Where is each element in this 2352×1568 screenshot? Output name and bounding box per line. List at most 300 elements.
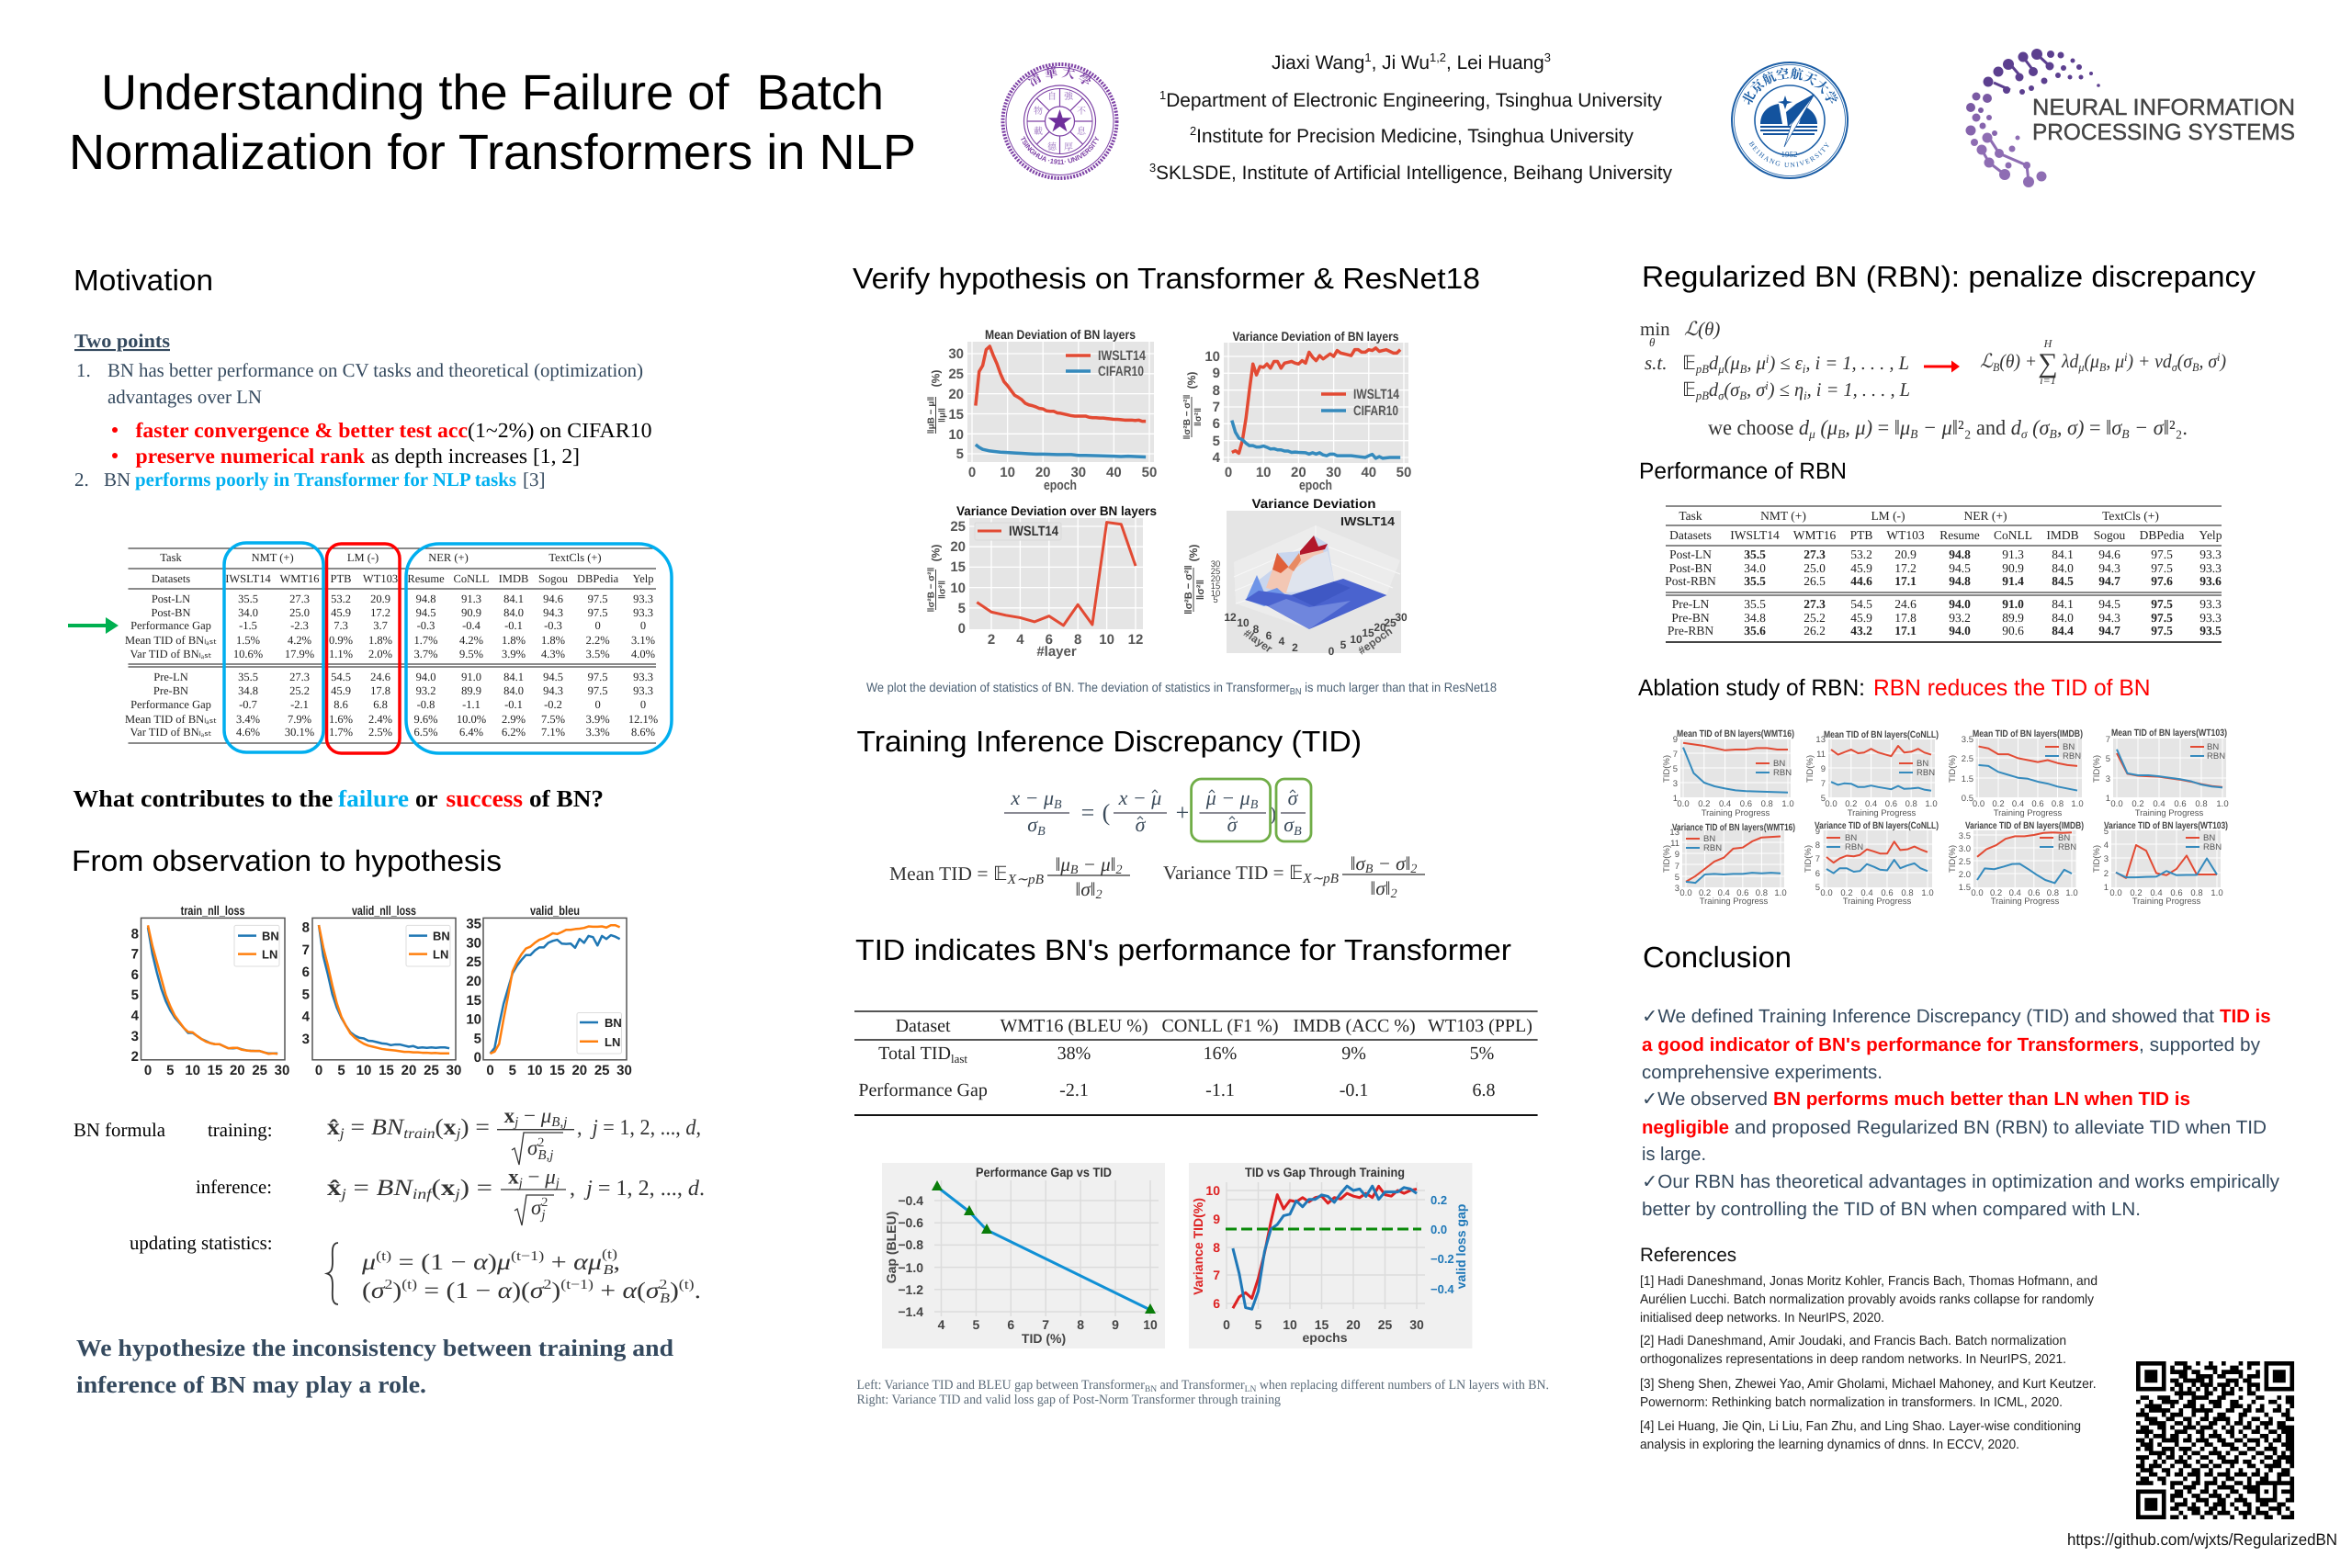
chart: variance TID CoNLL: 0.2 <box>1840 888 1853 898</box>
chart: variance TID WT103: 2 <box>2104 869 2109 879</box>
formula: BN inference: j <box>339 1187 347 1202</box>
heading: performance of RBN: Performance of RBN <box>1639 458 1847 484</box>
formula: updating statistics: (σ <box>362 1279 382 1303</box>
table: BN versus LN across tasks: -1.1 <box>462 698 481 711</box>
chart: variance TID WMT16 <box>1662 822 1795 907</box>
table: performance of RBN: Post-BN <box>1669 561 1713 575</box>
formula: constrained objective: d <box>1709 352 1719 374</box>
text: conclusion bullets: is large. <box>1642 1144 1706 1165</box>
chart: variance TID WT103: 0.4 <box>2150 888 2163 898</box>
chart: valid bleu: 15 <box>549 1063 565 1078</box>
chart: mean TID CoNLL: 1.0 <box>1925 799 1938 809</box>
table: performance of RBN: 17.1 <box>1894 574 1917 588</box>
formula: BN training <box>327 1104 701 1165</box>
formula: variance TID <box>1163 852 1425 901</box>
text: two points: faster convergence & better test acc <box>136 419 468 443</box>
table: performance of RBN: 27.3 <box>1804 597 1826 611</box>
chart: TID vs gap through training: Variance TID(%) <box>1191 1198 1205 1295</box>
formula: BN training: ) = <box>460 1115 490 1140</box>
table: BN versus LN across tasks: Pre-LN <box>153 671 188 683</box>
table: BN versus LN across tasks: DBPedia <box>577 572 619 585</box>
chart: performance gap vs TID: 6 <box>1007 1317 1014 1332</box>
formula: normalization decomposition: σ <box>1227 813 1238 836</box>
panel: ablation study <box>1638 675 2229 907</box>
chart: mean TID CoNLL: 9 <box>1821 764 1826 774</box>
table: performance of RBN: 35.5 <box>1744 597 1766 611</box>
formula: BN inference: x <box>441 1176 456 1201</box>
chart: variance TID CoNLL: Training Progress <box>1843 897 1912 907</box>
text: reference list: orthogonalizes representations in deep random networks. In NeurIPS, 2021. <box>1640 1352 2066 1367</box>
formula: constrained objective: d <box>1709 378 1719 400</box>
chart: 3D variance deviation surface: 10 <box>1237 616 1250 629</box>
chart: variance TID CoNLL: TID(%) <box>1804 845 1814 873</box>
formula: BN inference: ) = <box>460 1176 492 1201</box>
chart: variance deviation over BN layers: 25 <box>950 519 966 535</box>
formula: penalized objective <box>1980 337 2226 387</box>
chart: variance deviation over BN layers: 8 <box>1074 632 1081 648</box>
logo: Tsinghua University: 載 <box>1034 123 1043 137</box>
formula: constrained objective: θ <box>1649 335 1656 349</box>
formula: updating statistics: (t) <box>602 1247 617 1262</box>
text: two points: [3] <box>523 468 546 491</box>
table: performance of RBN: 84.5 <box>2052 574 2074 588</box>
chart: performance gap vs TID: 4 <box>938 1317 945 1332</box>
formula: variance TID: X∼pB <box>1302 872 1339 886</box>
chart: train nll loss: 7 <box>131 947 139 963</box>
formula: BN training: j <box>513 1115 518 1130</box>
chart: performance gap vs TID: −1.2 <box>898 1282 923 1297</box>
table: BN versus LN across tasks: Datasets <box>152 572 190 585</box>
table: performance of RBN: 94.7 <box>2098 574 2120 588</box>
chart: train nll loss: 2 <box>131 1049 139 1065</box>
formula: variance TID: ‖σ‖ <box>1370 877 1397 901</box>
formula: normalization decomposition: σ <box>1027 813 1046 839</box>
formula: penalized objective: , μ <box>2106 350 2124 372</box>
formula: constrained objective <box>1640 318 1910 402</box>
table: BN versus LN across tasks: 3.9% <box>586 713 610 726</box>
chart: mean TID CoNLL: RBN <box>1917 768 1935 778</box>
chart: mean TID WT103: 0.0 <box>2110 799 2123 809</box>
chart: mean TID CoNLL: Training Progress <box>1848 808 1917 818</box>
table: BN versus LN across tasks: 94.8 <box>416 592 435 605</box>
chart: variance TID IMDB: Variance TID of BN layers(IMDB) <box>1965 820 2084 831</box>
authors and affiliations: 2 <box>1190 124 1196 138</box>
table: BN versus LN across tasks: 0.9% <box>329 634 353 647</box>
formula: choice of distance: , σ) <box>2057 416 2084 439</box>
table: BN versus LN across tasks: Performance Gap <box>130 619 211 632</box>
chart: valid bleu: valid_bleu <box>530 903 580 918</box>
table: BN versus LN across tasks: Sogou <box>538 572 569 585</box>
formula: variance TID: Variance TID = 𝔼 <box>1163 862 1302 884</box>
table: performance of RBN: 94.8 <box>1949 547 1971 561</box>
highlight: NER and TextCls columns <box>406 544 672 753</box>
table: performance of RBN: 90.9 <box>2002 561 2024 575</box>
table: performance of RBN: Post-LN <box>1669 547 1712 561</box>
table: TID and performance gap: -0.1 <box>1340 1080 1368 1100</box>
authors and affiliations: , Lei Huang <box>1446 52 1544 73</box>
formula: constrained objective: ) ≤ η <box>1768 378 1804 400</box>
formula: choice of distance: − μ <box>1917 416 1952 439</box>
chart: mean TID WMT16: 0.6 <box>1740 799 1752 809</box>
table: BN versus LN across tasks: 3.5% <box>586 648 610 660</box>
formula: BN training: BN <box>371 1115 405 1140</box>
chart: variance TID WMT16: 5 <box>1675 873 1679 883</box>
formula: constrained objective: , i = 1, . . . , L <box>1805 352 1909 374</box>
chart: variance TID IMDB: 2.5 <box>1959 857 1971 867</box>
table: TID and performance gap: CONLL (F1 %) <box>1161 1016 1279 1036</box>
caption: left and right charts: Left: Variance TID and BLEU gap between Transformer <box>856 1378 1158 1393</box>
chart: variance TID WT103: 1 <box>2104 883 2109 893</box>
formula: BN training: 2 <box>537 1136 544 1150</box>
table: TID and performance gap: Dataset <box>896 1016 951 1036</box>
table: performance of RBN: 25.0 <box>1804 561 1826 575</box>
formula: normalization decomposition: ) <box>1270 802 1276 825</box>
table: performance of RBN: 89.9 <box>2002 611 2024 625</box>
formula: choice of distance: − σ <box>2130 416 2165 439</box>
logo: Tsinghua University: 德 <box>1047 139 1057 152</box>
chart: variance TID CoNLL: RBN <box>1845 842 1863 852</box>
chart: train nll loss: 4 <box>131 1009 140 1024</box>
text: conclusion bullets: a good indicator of BN's performance for Transformers <box>1642 1034 2139 1055</box>
table: BN versus LN across tasks: 97.5 <box>588 684 608 697</box>
chart: variance deviation over BN layers: 20 <box>950 539 966 555</box>
chart: variance deviation over BN layers: 6 <box>1046 632 1053 648</box>
table: TID and performance gap: WT103 (PPL) <box>1428 1016 1532 1036</box>
chart: valid bleu: 5 <box>509 1063 516 1078</box>
chart: mean TID IMDB: TID(%) <box>1948 755 1958 783</box>
table: performance of RBN: 84.4 <box>2052 624 2074 637</box>
chart: valid bleu: 20 <box>571 1063 587 1078</box>
chart: variance TID IMDB: RBN <box>2058 842 2076 852</box>
table: BN versus LN across tasks: -0.1 <box>504 619 523 632</box>
question: what contributes: or <box>415 785 438 812</box>
table: BN versus LN across tasks: 4.2% <box>288 634 311 647</box>
chart: variance deviation of BN layers: 50 <box>1396 465 1411 480</box>
chart: mean deviation of BN layers: Mean Deviation of BN layers <box>985 327 1136 342</box>
table: performance of RBN: 44.6 <box>1850 574 1872 588</box>
chart: mean deviation of BN layers: (%) <box>930 370 943 387</box>
heading: conclusion: Conclusion <box>1643 941 1792 974</box>
chart: train nll loss: LN <box>262 948 277 962</box>
chart: variance TID WT103: 5 <box>2104 827 2109 837</box>
table: BN versus LN across tasks: 1.1% <box>329 648 353 660</box>
formula: BN inference: x <box>508 1165 519 1189</box>
table: BN versus LN across tasks: 94.0 <box>416 671 435 683</box>
table: performance of RBN: 17.1 <box>1894 624 1917 637</box>
table: BN versus LN across tasks: 25.0 <box>289 606 310 619</box>
table: performance of RBN: 27.3 <box>1804 547 1826 561</box>
table: BN versus LN across tasks: -0.1 <box>504 698 523 711</box>
chart: variance TID WMT16: 0.8 <box>1756 888 1768 898</box>
chart: variance TID IMDB: 0.4 <box>2009 888 2021 898</box>
table: TID and performance gap: 16% <box>1204 1043 1237 1064</box>
chart: performance gap vs TID: −1.0 <box>898 1260 923 1275</box>
table: performance of RBN: DBPedia <box>2140 528 2184 542</box>
table: BN versus LN across tasks: 1.7% <box>413 634 438 647</box>
chart: mean TID WMT16: 0.8 <box>1761 799 1773 809</box>
chart: variance TID WT103: TID(%) <box>2092 845 2102 873</box>
chart: TID vs gap through training: 20 <box>1346 1317 1361 1332</box>
chart: variance TID WT103: 0.8 <box>2190 888 2203 898</box>
table: BN versus LN across tasks: 3.4% <box>236 713 260 726</box>
formula: normalization decomposition: σ <box>1136 813 1147 836</box>
chart: 3D variance deviation surface: 20 <box>1374 621 1386 634</box>
chart: variance TID IMDB <box>1948 820 2084 907</box>
text: conclusion bullets: ✓We defined Training Inference Discrepancy (TID) and showed that <box>1642 1006 2214 1027</box>
chart: valid nll loss: 5 <box>337 1063 345 1078</box>
chart: 3D variance deviation surface: Variance Deviation <box>1251 496 1376 511</box>
text: conclusion bullets: better by controlling the TID of BN when compared with LN. <box>1642 1199 2141 1220</box>
chart: TID vs gap through training: −0.2 <box>1430 1252 1454 1266</box>
question: what contributes: failure <box>338 785 409 812</box>
table: BN versus LN across tasks: 6.5% <box>413 726 438 739</box>
formula: penalized objective: (μ <box>2084 350 2099 372</box>
chart: variance TID CoNLL: 5 <box>1815 883 1820 893</box>
formula: constrained objective: , i = 1, . . . , L <box>1807 378 1910 400</box>
table: BN versus LN across tasks: NER (+) <box>428 551 469 564</box>
table: TID and performance gap <box>854 1011 1538 1115</box>
chart: variance TID WT103: 0.0 <box>2109 888 2122 898</box>
chart: variance TID IMDB: BN <box>2058 833 2070 843</box>
text: reference list: analysis in exploring the learning dynamics of dnns. In ECCV, 2020. <box>1640 1438 2019 1452</box>
table: performance of RBN: 94.5 <box>1949 561 1971 575</box>
table: BN versus LN across tasks: 8.6% <box>631 726 655 739</box>
formula: BN inference: 2 <box>541 1196 548 1210</box>
chart: 3D variance deviation surface: (%) <box>1187 545 1200 561</box>
table: BN versus LN across tasks: 94.6 <box>543 592 563 605</box>
chart: 3D variance deviation surface: 2 <box>1292 641 1298 654</box>
formula: constrained objective: μ <box>1717 362 1724 376</box>
chart: variance TID IMDB: Training Progress <box>1991 897 2060 907</box>
chart: valid bleu: 10 <box>466 1012 481 1027</box>
logo: Tsinghua University: 強 <box>1064 88 1074 102</box>
table: BN versus LN across tasks: 34.0 <box>238 606 258 619</box>
table: BN versus LN across tasks: 10.0% <box>457 713 486 726</box>
authors and affiliations <box>1149 51 1672 184</box>
text: two points: as depth increases [1, 2] <box>371 445 580 468</box>
table: performance of RBN: 53.2 <box>1850 547 1872 561</box>
chart: variance deviation of BN layers: CIFAR10 <box>1353 403 1398 419</box>
authors and affiliations: 3 <box>1149 161 1156 175</box>
chart: variance deviation over BN layers: IWSLT14 <box>1009 524 1059 539</box>
table: performance of RBN: 45.9 <box>1850 611 1872 625</box>
formula: penalized objective: i=1 <box>2040 374 2056 387</box>
chart: variance TID IMDB: 0.2 <box>1990 888 2002 898</box>
table: performance of RBN: 91.3 <box>2002 547 2024 561</box>
logo: Tsinghua University: 息 <box>1077 123 1087 137</box>
formula: BN training: μ <box>540 1104 551 1127</box>
chart: 3D variance deviation surface: 4 <box>1279 635 1285 648</box>
chart: valid bleu: 10 <box>527 1063 543 1078</box>
table: TID and performance gap: 38% <box>1057 1043 1091 1064</box>
table: performance of RBN: Sogou <box>2094 528 2126 542</box>
formula: penalized objective: i <box>2124 350 2128 364</box>
table: performance of RBN: 45.9 <box>1850 561 1872 575</box>
formula: BN training: σ <box>527 1136 537 1159</box>
text: reference list: Powernorm: Rethinking batch normalization in transformers. In ICML, 2020. <box>1640 1395 2063 1410</box>
formula: BN inference: j <box>539 1208 546 1223</box>
table: BN versus LN across tasks: 0 <box>594 698 601 711</box>
formula: updating statistics: (t−1) <box>560 1278 594 1292</box>
formula: BN training: j <box>338 1126 345 1142</box>
formula: constrained objective: pB <box>1695 389 1709 402</box>
formula: BN inference: σ <box>531 1196 541 1219</box>
table: TID and performance gap: Total TID <box>878 1043 967 1066</box>
table: performance of RBN: LM (-) <box>1871 509 1905 523</box>
chart: mean TID WMT16: Training Progress <box>1702 808 1770 818</box>
formula: updating statistics: B <box>603 1263 613 1278</box>
table: performance of RBN: CoNLL <box>1994 528 2032 542</box>
chart: variance TID WMT16: 9 <box>1675 850 1679 860</box>
formula: constrained objective: 𝔼 <box>1682 378 1696 400</box>
chart: variance TID IMDB: 3.5 <box>1959 831 1971 841</box>
table: BN versus LN across tasks: 91.3 <box>461 592 481 605</box>
table: BN versus LN across tasks: 24.6 <box>370 671 390 683</box>
table: BN versus LN across tasks: 45.9 <box>331 684 351 697</box>
table: BN versus LN across tasks: 0 <box>594 619 601 632</box>
text: conclusion bullets: comprehensive experiments. <box>1642 1062 1883 1083</box>
text: repository URL: https://github.com/wjxts/RegularizedBN <box>2067 1530 2337 1549</box>
formula: choice of distance: B <box>2121 428 2130 442</box>
caption: left and right charts: BN <box>1145 1384 1157 1394</box>
formula: constrained objective: σ <box>1718 389 1724 402</box>
table: performance of RBN: TextCls (+) <box>2102 509 2159 523</box>
chart: valid bleu: 25 <box>466 954 481 970</box>
chart: mean TID WMT16: 1 <box>1673 794 1678 804</box>
chart: mean TID WMT16: 7 <box>1673 750 1678 760</box>
table: BN versus LN across tasks: Mean TID of BNₗₐₛₜ <box>125 634 217 647</box>
chart: valid nll loss: 15 <box>379 1063 394 1078</box>
chart: performance gap vs TID <box>882 1163 1165 1348</box>
formula: constrained objective: i <box>1766 352 1770 366</box>
table: BN versus LN across tasks: 84.1 <box>503 671 524 683</box>
chart: valid nll loss: 6 <box>302 964 310 980</box>
formula: updating statistics: + <box>544 1250 573 1275</box>
chart: train nll loss: 8 <box>131 926 139 942</box>
chart: variance deviation of BN layers: (%) <box>1185 372 1198 389</box>
formula: BN training: train <box>403 1126 435 1142</box>
chart: variance deviation over BN layers: 12 <box>1128 632 1143 648</box>
heading: ablation study: RBN reduces the TID of BN <box>1873 675 2150 701</box>
chart: variance TID WMT16: TID(%) <box>1662 845 1672 873</box>
table: performance of RBN: 93.6 <box>2199 574 2222 588</box>
table: BN versus LN across tasks: 90.9 <box>461 606 481 619</box>
table: performance of RBN: 35.5 <box>1744 547 1766 561</box>
table: BN versus LN across tasks: 1.5% <box>236 634 260 647</box>
chart: valid nll loss: 30 <box>447 1063 461 1078</box>
chart: mean TID CoNLL: 13 <box>1815 735 1826 745</box>
formula: updating statistics: (t) <box>679 1278 695 1292</box>
table: BN versus LN across tasks: 84.0 <box>503 606 524 619</box>
formula: mean TID: 2 <box>1116 863 1123 877</box>
table: BN versus LN across tasks: 93.2 <box>416 684 435 697</box>
chart: mean TID WT103: 5 <box>2106 754 2110 764</box>
chart: train nll loss: 20 <box>230 1063 245 1078</box>
chart: mean TID WMT16: 9 <box>1673 735 1678 745</box>
text: hypothesis statement <box>76 1335 674 1398</box>
formula: BN training: x <box>444 1115 457 1140</box>
formula: choice of distance: = ‖σ <box>2089 416 2122 439</box>
table: BN versus LN across tasks: 30.1% <box>285 726 314 739</box>
chart: variance TID CoNLL <box>1804 820 1939 907</box>
text: conclusion bullets: BN performs much better than LN when TID is <box>1773 1089 2190 1110</box>
chart: variance TID CoNLL: BN <box>1845 833 1857 843</box>
table: performance of RBN: NER (+) <box>1964 509 2007 523</box>
table: BN versus LN across tasks: 94.5 <box>543 671 563 683</box>
text: BN formula labels: training: <box>208 1119 272 1141</box>
chart: valid nll loss: 20 <box>401 1063 416 1078</box>
formula: BN inference: j <box>517 1176 523 1190</box>
table: BN versus LN across tasks: 54.5 <box>331 671 351 683</box>
chart: 3D variance deviation surface: 20 <box>1211 574 1220 584</box>
logo: Tsinghua University: 自 <box>1047 88 1057 102</box>
formula: mean TID: Mean TID = 𝔼 <box>889 863 1004 885</box>
chart: variance deviation of BN layers: Variance Deviation of BN layers <box>1233 329 1399 344</box>
chart: train nll loss <box>131 903 289 1078</box>
chart: train nll loss: 30 <box>275 1063 289 1078</box>
chart: mean TID WT103: 1 <box>2106 794 2110 804</box>
chart: train nll loss: 5 <box>166 1063 174 1078</box>
heading: ablation study <box>1638 675 2150 701</box>
formula: BN inference: inf <box>413 1187 435 1202</box>
chart: variance deviation over BN layers: Variance Deviation over BN layers <box>956 503 1157 518</box>
formula: normalization decomposition: σ <box>1288 786 1299 809</box>
arrow: constraint to penalty <box>1924 360 1960 373</box>
text: reference list: [3] Sheng Shen, Zhewei Yao, Amir Gholami, Michael Mahoney, and Kurt Keutzer. <box>1640 1377 2097 1392</box>
chart: TID vs gap through training: 5 <box>1255 1317 1262 1332</box>
chart: train nll loss: train_nll_loss <box>181 903 245 918</box>
formula: choice of distance: ‖²₂ and d <box>1952 416 2021 439</box>
formula: normalization decomposition: B <box>1294 825 1302 839</box>
chart: mean TID WT103 <box>2092 728 2229 818</box>
table: TID and performance gap: -1.1 <box>1205 1080 1235 1100</box>
chart: TID vs gap through training: 0 <box>1223 1317 1230 1332</box>
formula: updating statistics: = (1 − <box>391 1250 473 1275</box>
formula: constrained objective: i <box>1803 362 1806 376</box>
table: performance of RBN: 26.2 <box>1804 624 1826 637</box>
chart: mean TID IMDB: 3.5 <box>1962 735 1973 745</box>
formula: choice of distance: σ <box>2021 428 2029 442</box>
table: BN versus LN across tasks: 1.8% <box>368 634 392 647</box>
logo: Neural Information Processing Systems: NEURAL INFORMATION <box>2032 95 2295 120</box>
formula: updating statistics: α)(σ <box>498 1279 541 1303</box>
chart: mean deviation of BN layers: IWSLT14 <box>1098 348 1147 364</box>
chart: mean deviation of BN layers: 40 <box>1106 465 1122 480</box>
chart: train nll loss: BN <box>262 930 279 943</box>
table: performance of RBN: 34.0 <box>1744 561 1766 575</box>
table: BN versus LN across tasks: 27.3 <box>289 592 310 605</box>
chart: performance gap vs TID: −0.4 <box>898 1193 923 1208</box>
chart: TID vs gap through training: 10 <box>1205 1183 1220 1198</box>
formula: mean TID: X∼pB <box>1007 873 1044 887</box>
table: BN versus LN across tasks: WMT16 <box>279 572 320 585</box>
table: performance of RBN: 84.0 <box>2052 611 2074 625</box>
authors and affiliations: Jiaxi Wang <box>1272 52 1365 73</box>
table: BN versus LN across tasks: 4.0% <box>631 648 655 660</box>
table: BN versus LN across tasks: Var TID of BNₗₐₛₜ <box>130 648 211 660</box>
table: BN versus LN across tasks: 97.5 <box>588 606 608 619</box>
formula: constrained objective: , μ <box>1747 352 1766 374</box>
table: performance of RBN: 93.5 <box>2199 624 2222 637</box>
formula: BN inference: j <box>453 1187 460 1202</box>
chart: mean deviation of BN layers: 5 <box>956 446 964 462</box>
chart: mean TID CoNLL: 5 <box>1821 794 1826 804</box>
table: BN versus LN across tasks: 84.0 <box>503 684 524 697</box>
text: reference list: initialised deep networks. In NeurIPS, 2020. <box>1640 1311 1884 1325</box>
text: two points: 2. <box>74 468 89 491</box>
chart: mean TID WT103: 0.4 <box>2153 799 2165 809</box>
formula: updating statistics: α(σ <box>622 1279 657 1303</box>
